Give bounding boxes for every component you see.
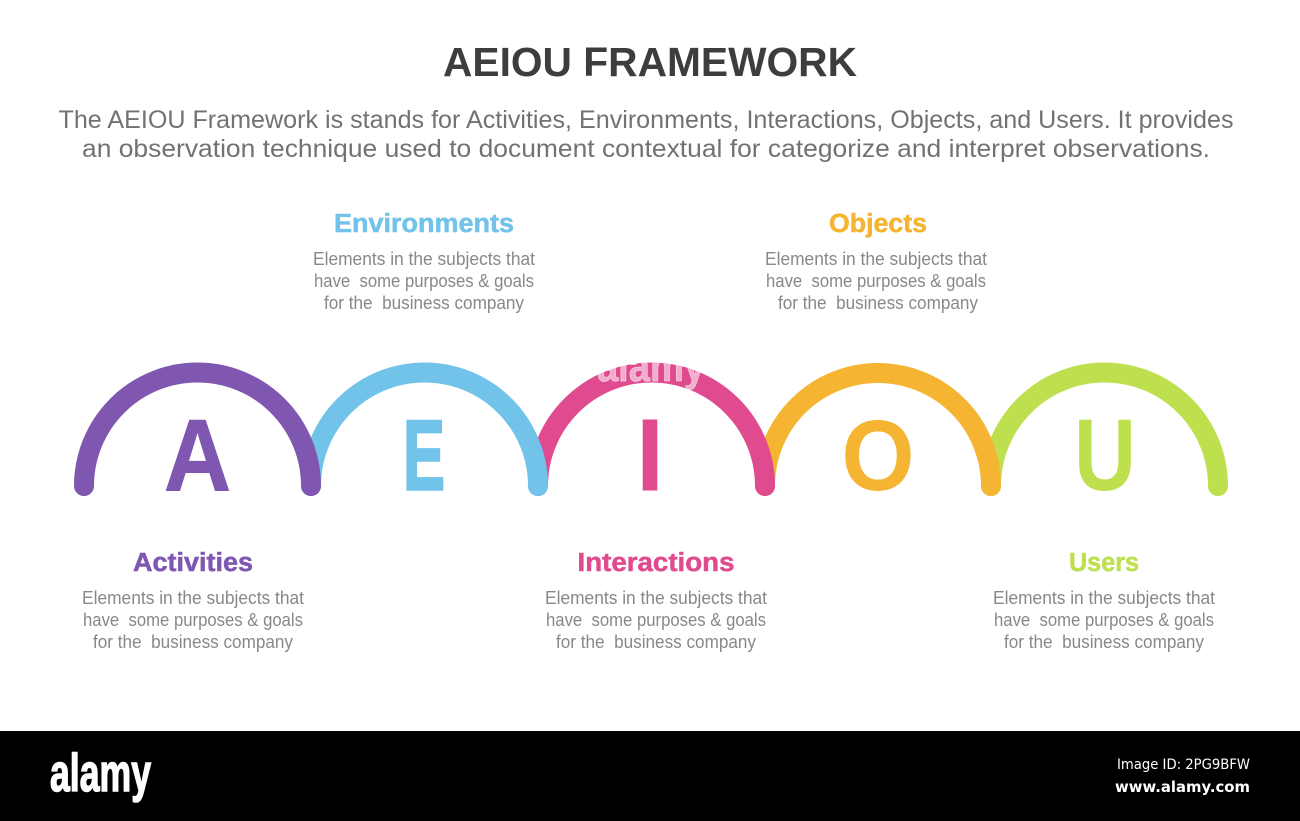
block: environments: for the business company <box>324 292 525 313</box>
block: users <box>993 549 1215 652</box>
arch: E: E <box>403 400 445 510</box>
intro text: The AEIOU Framework is stands for Activities, Environments, Interactions, Objects, and Users. It provides <box>58 106 1234 134</box>
intro text: an observation technique used to document contextual for categorize and interpret observations. <box>82 135 1210 163</box>
block: environments: Environments <box>334 210 514 238</box>
block: activities: have some purposes & goals <box>83 609 303 630</box>
arch: E <box>311 372 538 510</box>
arch: O: O <box>842 400 914 512</box>
block: environments: Elements in the subjects that <box>313 248 535 269</box>
arch: I <box>538 372 765 512</box>
watermark on pink arch: alamy <box>597 342 705 391</box>
block: interactions: Elements in the subjects that <box>545 587 767 608</box>
block: users: Users <box>1069 549 1139 577</box>
block: objects: have some purposes & goals <box>766 270 986 291</box>
image id: Image ID: 2PG9BFW <box>1117 757 1250 773</box>
block: environments: have some purposes & goals <box>314 270 534 291</box>
block: activities: Activities <box>133 549 253 577</box>
logo: alamy: alamy <box>50 744 151 803</box>
arch: U <box>991 372 1218 512</box>
arch: O <box>765 373 991 512</box>
arch: A: A <box>164 398 231 512</box>
block: users: have some purposes & goals <box>994 609 1214 630</box>
arch: U: U <box>1074 398 1136 512</box>
block: environments <box>313 210 535 313</box>
footer bar <box>0 731 1300 821</box>
block: activities: Elements in the subjects that <box>82 587 304 608</box>
block: objects: for the business company <box>778 292 979 313</box>
block: objects <box>765 210 987 313</box>
block: interactions <box>545 549 767 652</box>
website: www.alamy.com <box>1115 778 1250 796</box>
block: interactions: Interactions <box>578 549 734 577</box>
intro text <box>58 106 1234 163</box>
block: objects: Elements in the subjects that <box>765 248 987 269</box>
title: AEIOU FRAMEWORK <box>443 39 857 85</box>
block: activities: for the business company <box>93 631 294 652</box>
arch: I: I <box>636 398 664 512</box>
block: interactions: for the business company <box>556 631 757 652</box>
block: objects: Objects <box>829 210 927 238</box>
block: activities <box>82 549 304 652</box>
block: users: for the business company <box>1004 631 1205 652</box>
block: users: Elements in the subjects that <box>993 587 1215 608</box>
arch: A <box>84 373 311 512</box>
block: interactions: have some purposes & goals <box>546 609 766 630</box>
